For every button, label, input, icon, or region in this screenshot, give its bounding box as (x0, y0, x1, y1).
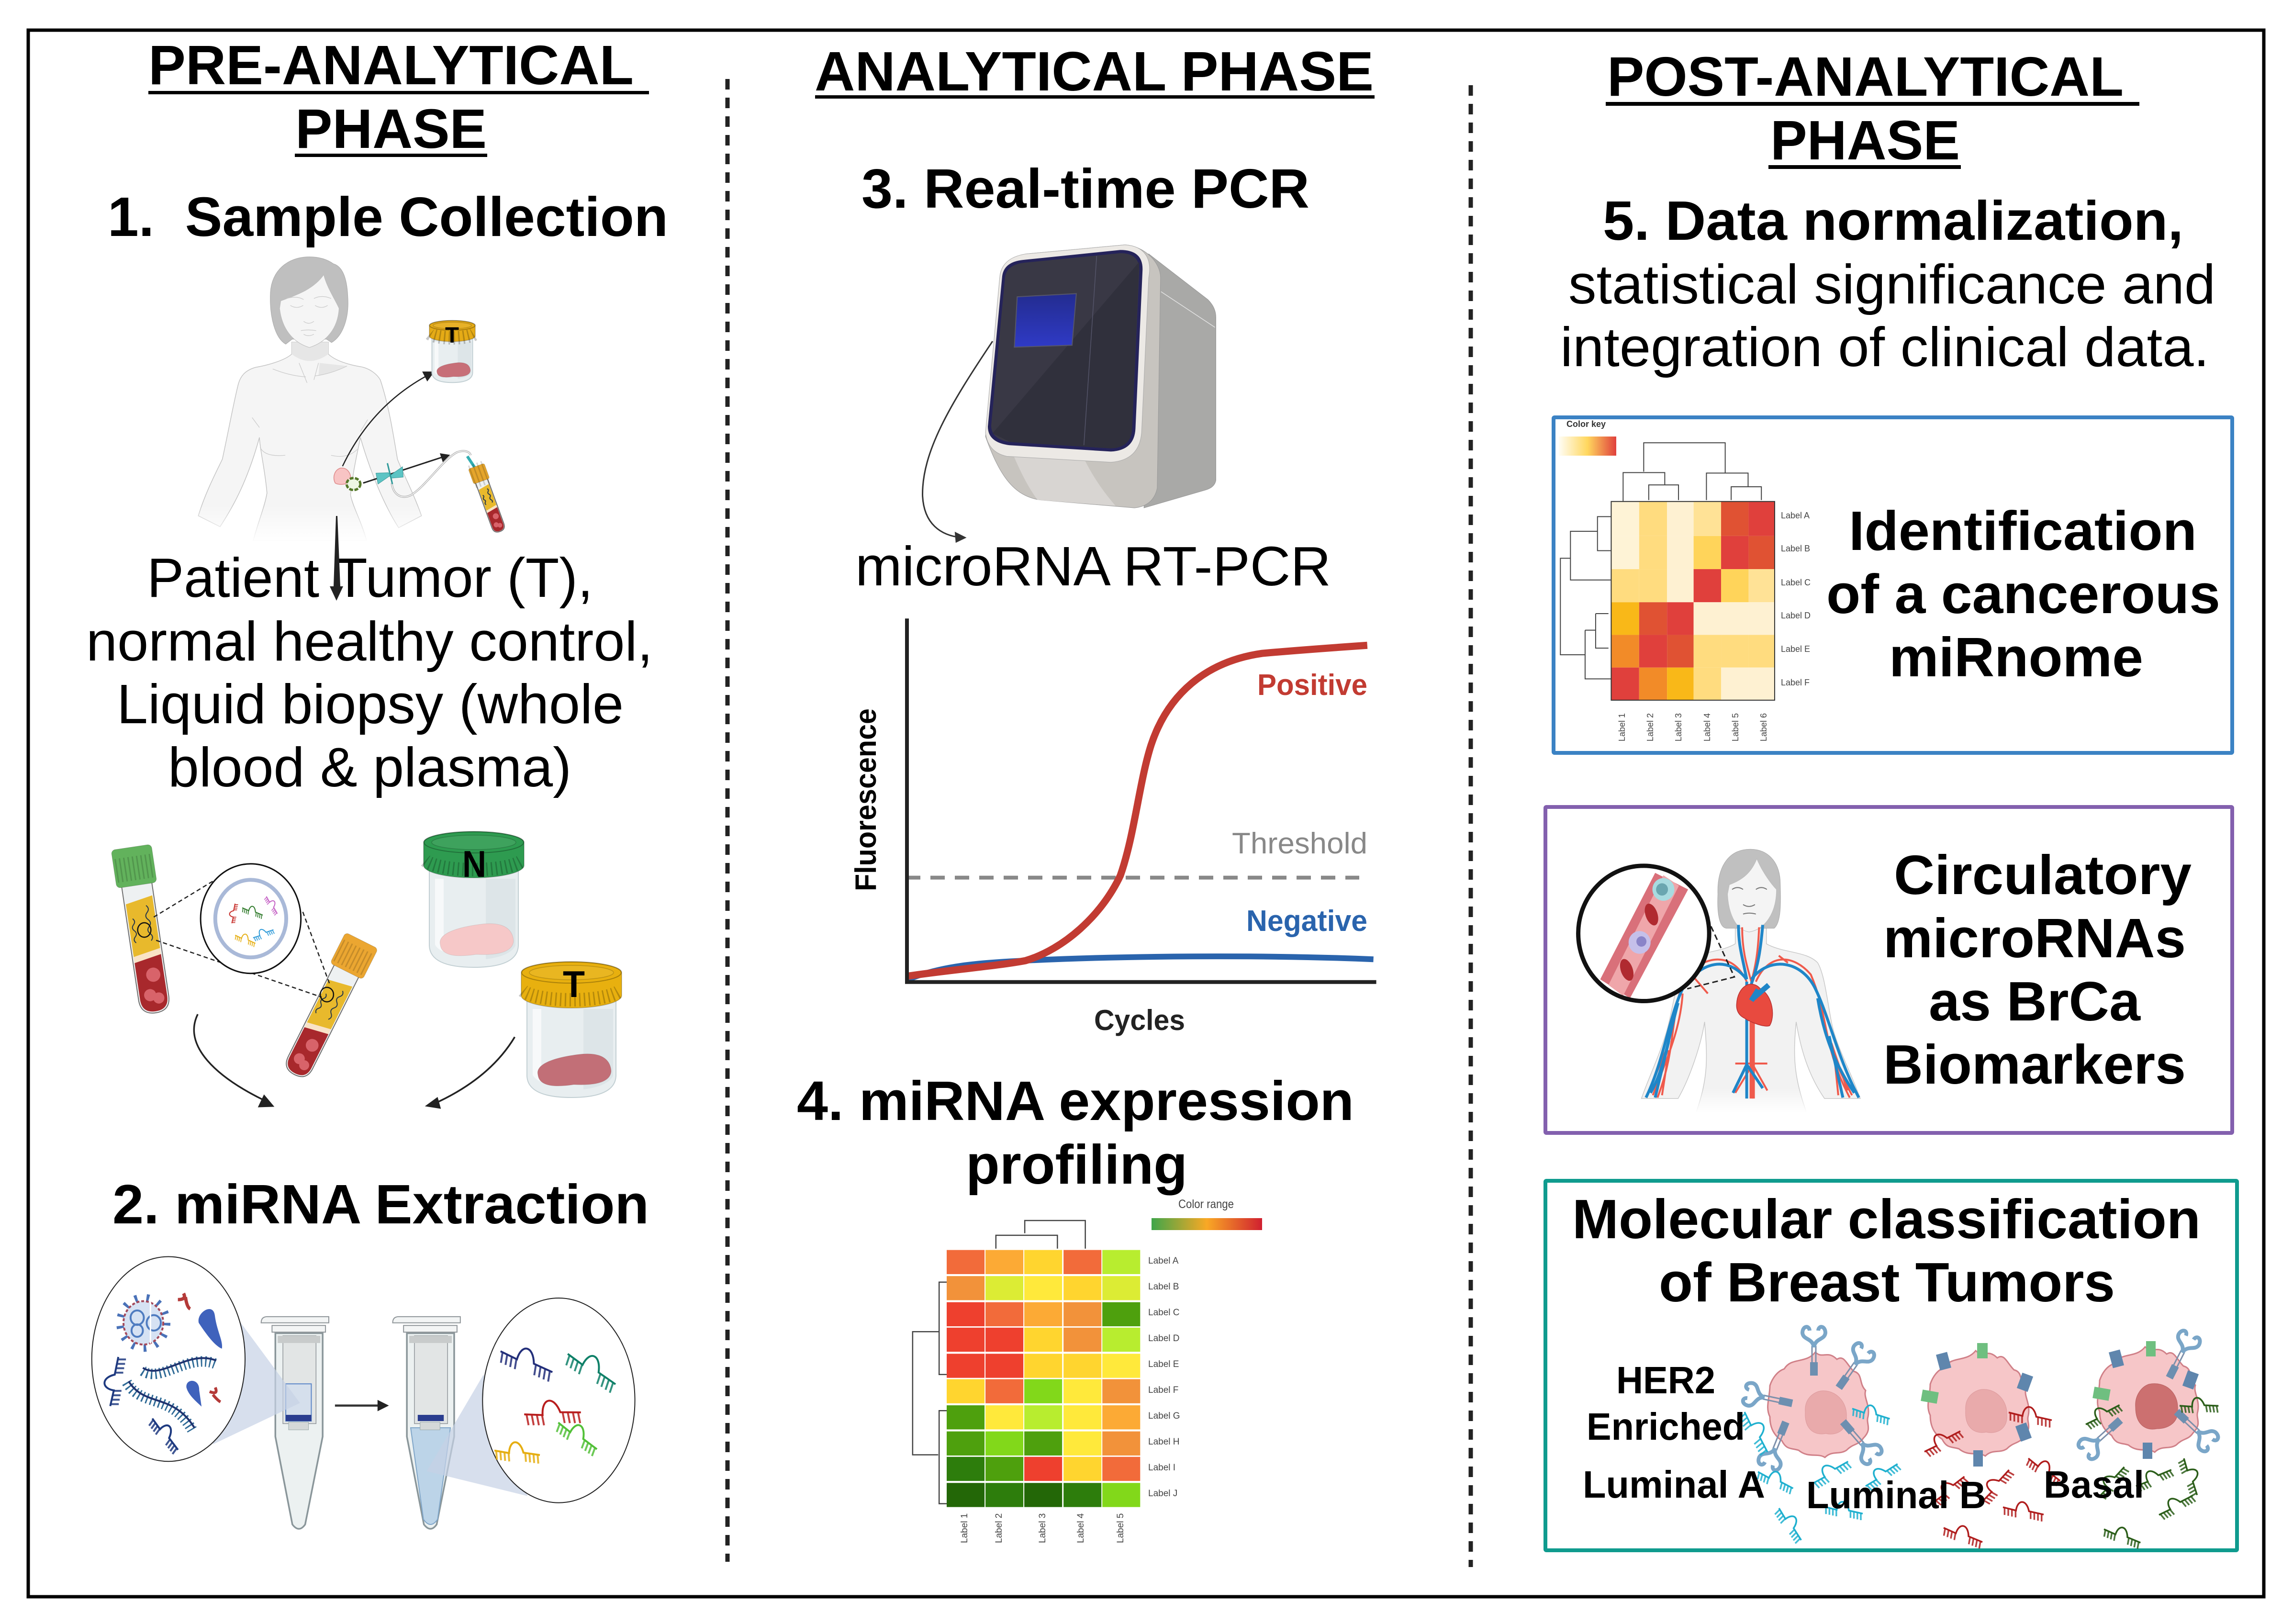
panel: cancerous miRnome (1554, 417, 2232, 753)
label HER2 enriched: HER2 (1616, 1359, 1715, 1401)
text: identification: miRnome (1889, 626, 2143, 688)
positive curve (908, 645, 1367, 976)
icon: green cap blood tube (111, 844, 176, 1016)
label N: N (462, 843, 486, 885)
column labels: Label 2 (994, 1513, 1004, 1543)
patient body (198, 342, 422, 540)
text: sample sources: Liquid biopsy (whole (117, 673, 624, 735)
row labels: Label J (1148, 1489, 1177, 1499)
heatmap column labels: Label 3 (1674, 713, 1683, 741)
heading: analytical phase: ANALYTICAL PHASE (815, 40, 1374, 102)
heatmap: expression profile (913, 1198, 1262, 1543)
text: sample sources: normal healthy control, (86, 610, 653, 672)
heatmap column labels: Label 6 (1759, 713, 1768, 741)
chart: amplification curves (850, 618, 1376, 1036)
column divider left (726, 79, 729, 1562)
text: identification (1826, 500, 2220, 688)
arrow from blood tubes (194, 1014, 274, 1107)
row labels: Label C (1148, 1308, 1179, 1318)
patient features (252, 297, 368, 457)
text: sample sources: blood & plasma) (168, 736, 571, 798)
text: statistics and clinical data: statistical significance and (1568, 253, 2215, 315)
spin column after (392, 1317, 460, 1529)
icon: PCR machine (923, 245, 1216, 543)
heatmap row labels: Label C (1781, 578, 1811, 587)
icon: small blood tube (468, 463, 508, 534)
heading: miRNA extraction: 2. miRNA Extraction (112, 1173, 649, 1235)
patient hair (270, 257, 348, 344)
magnifier circle (201, 864, 301, 974)
miRNAs: basal (2082, 1394, 2220, 1549)
small target circles (138, 923, 334, 1002)
heading: miRNA expression profiling: 4. miRNA expression (797, 1070, 1354, 1132)
butterfly needle and tubing (376, 451, 476, 497)
column labels: Label 4 (1076, 1513, 1086, 1543)
cell: basal (2077, 1329, 2220, 1461)
cell: luminal B (1921, 1343, 2033, 1467)
text: circulatory microRNAs: Biomarkers (1883, 1033, 2186, 1096)
arrow between columns (335, 1400, 389, 1411)
arrow from tissue jars (425, 1037, 515, 1109)
icon: orange cap blood tube (278, 932, 378, 1083)
label luminal A: Luminal A (1583, 1463, 1765, 1506)
miRNAs: luminal B (1921, 1407, 2065, 1549)
color range legend (1152, 1198, 1262, 1230)
heatmap column labels: Label 5 (1731, 713, 1740, 741)
patient face (280, 275, 339, 347)
negative curve (908, 956, 1374, 979)
heatmap column labels: Label 2 (1645, 713, 1655, 741)
miRNAs: HER2 enriched (1733, 1404, 1902, 1545)
label: microRNA RT-PCR: microRNA RT-PCR (855, 535, 1331, 597)
text: circulatory microRNAs: as BrCa (1929, 970, 2141, 1032)
label T: T (563, 963, 585, 1005)
zoom wedges (213, 1320, 527, 1496)
heatmap row labels: Label B (1781, 544, 1810, 553)
illustration: patient sampling (191, 257, 476, 543)
arrow: patient down (330, 516, 343, 601)
heatmap column labels (1617, 713, 1768, 741)
heading: post-analytical phase: POST-ANALYTICAL (1607, 45, 2124, 108)
magnifier dashed leaders (154, 878, 330, 997)
arrow to RT-PCR label (923, 341, 993, 543)
panel title: of Breast Tumors (1659, 1251, 2115, 1313)
row labels: Label B (1148, 1282, 1179, 1292)
text: sample sources (86, 547, 653, 798)
cell: HER2 enriched (1742, 1327, 1884, 1471)
panel: molecular classification (1545, 1181, 2237, 1550)
heading: post-analytical phase (1606, 45, 2139, 171)
text: identification: of a cancerous (1826, 563, 2220, 625)
label HER2 enriched (1587, 1359, 1745, 1448)
infection site (347, 478, 360, 490)
heading: miRNA expression profiling (797, 1070, 1354, 1196)
magnifier: blood vessel (1578, 866, 1709, 1001)
illustration: liquid biopsy magnifier and extraction (92, 864, 635, 1529)
column labels: Label 1 (960, 1513, 970, 1543)
text: statistics and clinical data: integration of clinical data. (1560, 316, 2209, 378)
tumor (334, 468, 351, 484)
panel: circulatory microRNAs (1545, 807, 2232, 1133)
arrow to tumor jar (343, 371, 435, 466)
label basal: Basal (2044, 1463, 2144, 1506)
heatmap (1560, 443, 1775, 700)
color range legend: Color range (1178, 1198, 1234, 1211)
heading: sample collection: 1. Sample Collection (108, 186, 668, 248)
row labels: Label H (1148, 1437, 1179, 1447)
row labels: Label G (1148, 1411, 1180, 1421)
row labels: Label E (1148, 1359, 1179, 1369)
y axis label: Fluorescence (850, 708, 883, 891)
heatmap row labels: Label D (1781, 611, 1811, 620)
label HER2 enriched: Enriched (1587, 1405, 1745, 1448)
text: sample sources: Patient Tumor (T), (147, 547, 593, 609)
patient neck shadow (291, 342, 347, 376)
label T on small jar: T (445, 323, 459, 347)
heading: pre-analytical phase: PRE-ANALYTICAL (148, 34, 634, 96)
text: identification: Identification (1849, 500, 2197, 562)
fade (191, 505, 432, 543)
row labels (1148, 1256, 1180, 1499)
icon: tumor tissue jar (521, 962, 622, 1098)
label threshold: Threshold (1232, 827, 1367, 860)
column labels: Label 3 (1038, 1513, 1048, 1543)
row labels: Label A (1148, 1256, 1179, 1266)
column labels (960, 1513, 1126, 1543)
panel title (1572, 1188, 2201, 1313)
color key: Color key (1566, 419, 1606, 429)
dendrograms (913, 1221, 1085, 1504)
x axis label: Cycles (1094, 1004, 1185, 1036)
label luminal B: Luminal B (1806, 1474, 1986, 1516)
icon: small tumor jar (429, 320, 475, 382)
text: circulatory microRNAs: microRNAs (1883, 907, 2186, 969)
color key (1559, 419, 1616, 456)
arrow to blood tube (363, 453, 450, 483)
threshold line (906, 876, 1359, 880)
heading: miRNA expression profiling: profiling (966, 1133, 1187, 1196)
heading: pre-analytical phase: PHASE (295, 98, 487, 160)
heading: real-time PCR: 3. Real-time PCR (861, 157, 1309, 220)
column divider right (1468, 85, 1473, 1567)
heatmap column labels: Label 4 (1702, 713, 1712, 741)
heatmap cells (947, 1250, 1140, 1507)
text: statistics and clinical data (1560, 253, 2215, 378)
axes (907, 618, 1376, 982)
text: circulatory microRNAs: Circulatory (1894, 844, 2192, 906)
oval: purified miRNA (482, 1298, 635, 1503)
panel title: Molecular classification (1572, 1188, 2201, 1250)
heading: pre-analytical phase (148, 34, 649, 160)
spin column before (261, 1317, 329, 1529)
illustration: circulatory system (1578, 849, 1860, 1113)
label positive: Positive (1257, 669, 1367, 702)
text: circulatory microRNAs (1883, 844, 2192, 1096)
heatmap row labels (1781, 511, 1811, 687)
row labels: Label I (1148, 1463, 1175, 1473)
label negative: Negative (1246, 905, 1367, 938)
oval: lysate contents (92, 1257, 245, 1461)
heading: post-analytical phase: PHASE (1770, 109, 1960, 171)
row labels: Label F (1148, 1385, 1178, 1395)
heatmap row labels: Label A (1781, 511, 1810, 520)
heading: data normalization: 5. Data normalization, (1603, 190, 2183, 252)
heatmap row labels: Label F (1781, 678, 1810, 687)
row labels: Label D (1148, 1333, 1179, 1344)
heatmap column labels: Label 1 (1617, 713, 1627, 741)
heatmap row labels: Label E (1781, 644, 1810, 654)
column labels: Label 5 (1116, 1513, 1126, 1543)
icon: normal tissue jar (424, 831, 524, 967)
